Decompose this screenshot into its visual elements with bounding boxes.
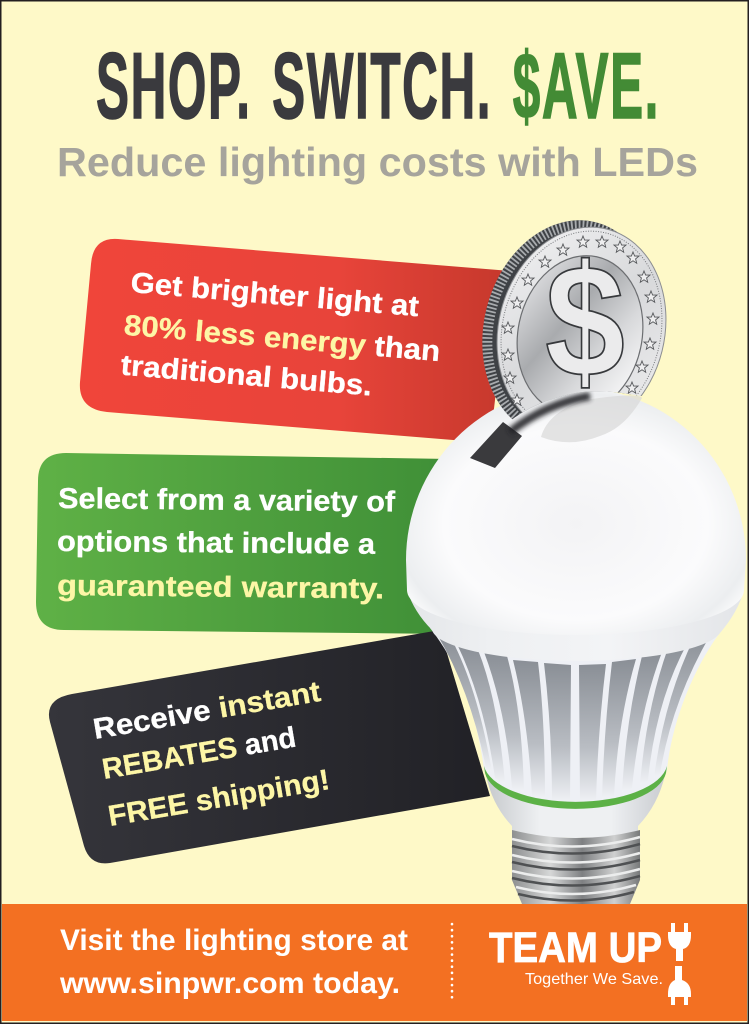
text: warranty options: guaranteed warranty. xyxy=(57,570,384,605)
bulb neck collar xyxy=(486,775,665,838)
text: rebates: Receive instant xyxy=(91,676,323,746)
dollar sign: $ xyxy=(545,233,625,411)
panel: rebates xyxy=(49,630,490,863)
call to action text xyxy=(59,924,408,1000)
text: brighter light xyxy=(119,267,445,408)
text: brighter light: Get brighter light at xyxy=(129,267,420,323)
call to action text: www.sinpwr.com today. xyxy=(59,967,400,1000)
logo: team up xyxy=(489,923,691,1005)
logo: team up: Together We Save. xyxy=(525,971,663,988)
bulb rim band xyxy=(407,590,744,661)
text: rebates: REBATES and xyxy=(100,722,298,786)
text: rebates xyxy=(91,676,332,833)
icon: plug xyxy=(668,923,691,961)
bulb screw base xyxy=(512,830,640,904)
logo: team up: TEAM UP xyxy=(489,924,662,972)
coin reflection xyxy=(541,395,642,442)
text: warranty options xyxy=(57,483,396,605)
icon: socket plug xyxy=(668,966,691,1005)
text: rebates: FREE shipping! xyxy=(106,764,332,833)
panel: warranty options xyxy=(36,453,450,634)
coin contact shadow xyxy=(510,396,590,432)
bulb dome xyxy=(406,388,746,635)
text: brighter light: traditional bulbs. xyxy=(119,350,373,403)
footer bar xyxy=(2,904,747,1021)
coin slot xyxy=(470,422,522,468)
icon: LED bulb xyxy=(406,388,746,904)
text: warranty options: options that include a xyxy=(57,526,376,561)
text: warranty options: Select from a variety of xyxy=(58,483,396,519)
bulb heat sink fins xyxy=(430,628,722,806)
panel: brighter light xyxy=(80,239,510,443)
call to action text: Visit the lighting store at xyxy=(60,924,408,957)
icon: silver dollar coin xyxy=(482,220,666,420)
subtitle: Reduce lighting costs with LEDs xyxy=(57,139,698,185)
bulb green ring xyxy=(484,766,667,809)
dotted divider xyxy=(451,924,453,1000)
text: brighter light: 80% less energy than xyxy=(123,310,441,368)
